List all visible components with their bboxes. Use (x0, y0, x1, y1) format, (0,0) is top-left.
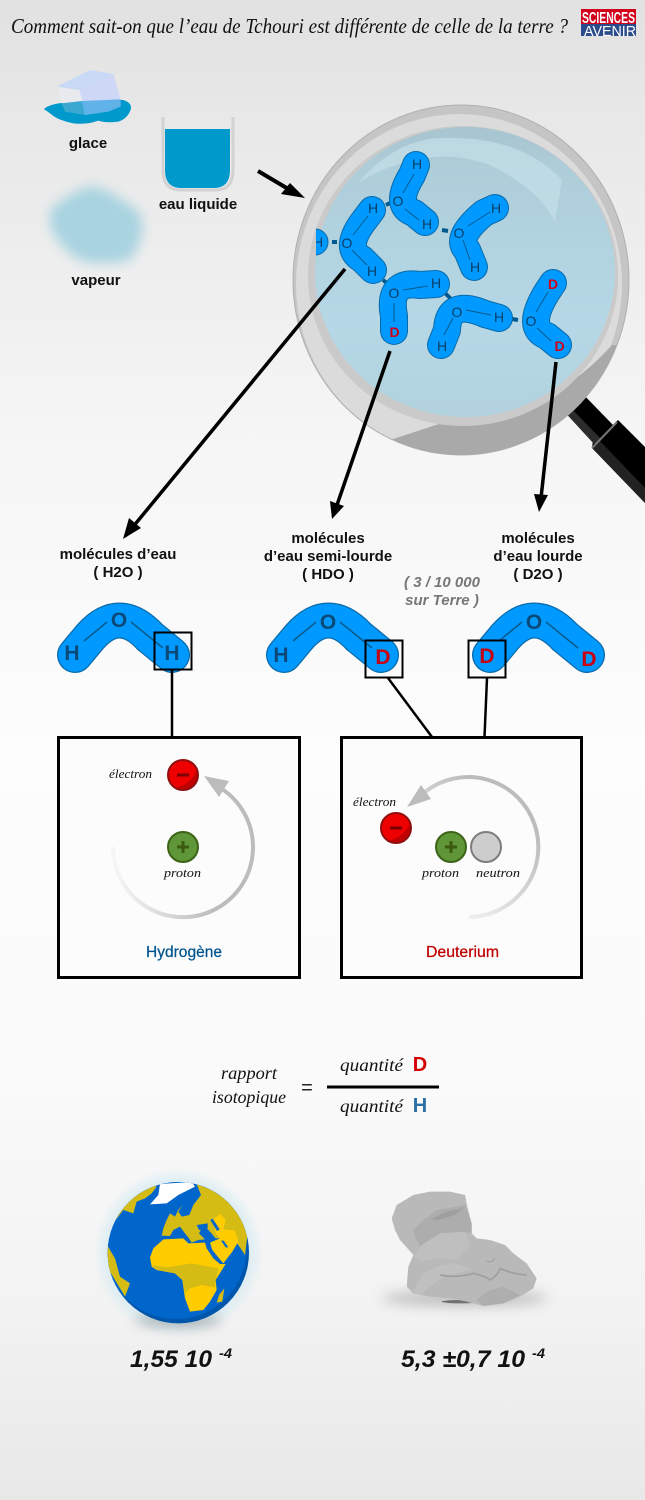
electron (168, 760, 200, 795)
big molecule: D2O (479, 611, 597, 671)
proton (436, 832, 466, 862)
big molecule: D2O: D (479, 645, 495, 668)
molecule H2O right: H (491, 200, 501, 216)
arrow: to heavy water molecule (534, 362, 556, 512)
highlight box on H (154, 632, 192, 670)
Eurasia (162, 1184, 248, 1255)
logo: Sciences et Avenir (581, 9, 636, 40)
molecule H2O right (454, 200, 501, 275)
molecule H2O left (342, 200, 378, 279)
molecule H2O right: H (470, 259, 480, 275)
icon: ice floating on water (44, 70, 131, 124)
value: comet ratio: -4 (532, 1345, 545, 1361)
note: 3 / 10 000 sur Terre: ( 3 / 10 000 (404, 574, 481, 591)
molecules inside the magnifier (302, 156, 565, 354)
panel: deuterium atom (342, 738, 582, 978)
label: molécules d'eau lourde D2O: molécules (501, 530, 575, 547)
label: molécules d'eau semi-lourde HDO (264, 530, 392, 583)
value: Earth ratio: 1,55 10 (130, 1346, 213, 1373)
proton (168, 832, 198, 862)
partial water molecule: H (313, 234, 323, 250)
molecule H2O upper: O (393, 193, 404, 209)
icon: magnifying glass handle (560, 390, 645, 503)
note: 3 / 10 000 sur Terre (404, 574, 481, 609)
Madagascar (217, 1288, 224, 1303)
molecule H2O upper: H (412, 156, 422, 172)
label: eau liquide: eau liquide (159, 196, 237, 213)
label: molécules d'eau semi-lourde HDO: d’eau semi-lourde (264, 548, 392, 565)
Africa (150, 1238, 226, 1312)
big molecule: HDO: O (320, 611, 336, 634)
icon: comet Tchouri (382, 1192, 548, 1306)
label: molécules d'eau semi-lourde HDO: molécules (291, 530, 365, 547)
label: molécules d'eau H2O: molécules d’eau (60, 546, 176, 563)
molecule H2O left: H (368, 200, 378, 216)
label: proton: proton (421, 865, 459, 880)
title: Comment sait-on que l’eau de Tchouri est différente de celle de la terre ? (11, 14, 568, 38)
label: molécules d'eau lourde D2O (493, 530, 583, 583)
molecule D2O: D (554, 338, 565, 354)
South America (108, 1246, 130, 1296)
label: rapport isotopique (212, 1063, 286, 1107)
orbit arrow (113, 776, 253, 917)
molecule HDO: D (389, 324, 400, 340)
icon: beaker of liquid water (163, 117, 233, 190)
label: molécules d'eau lourde D2O: ( D2O ) (513, 566, 563, 583)
arrow: water to magnifier (258, 171, 305, 198)
big molecule: D2O: D (581, 648, 597, 671)
label: électron: électron (353, 794, 396, 809)
molecule HDO: H (431, 275, 441, 291)
molecule HDO: O (389, 285, 400, 301)
molecule D2O: O (526, 313, 537, 329)
denominator: quantité (340, 1096, 404, 1116)
orbit arrow (407, 777, 538, 917)
molecule H2O lower: H (437, 338, 447, 354)
big molecule: H2O: O (111, 609, 127, 632)
formula: isotopic ratio (212, 1054, 439, 1117)
fraction bar (327, 1086, 439, 1088)
Black Sea (197, 1223, 208, 1230)
label: molécules d'eau semi-lourde HDO: ( HDO ) (302, 566, 354, 583)
label: glace: glace (69, 135, 107, 152)
molecule H2O upper (393, 156, 432, 232)
big molecule: H2O: H (64, 642, 80, 665)
label: molécules d'eau H2O: ( H2O ) (93, 564, 143, 581)
molecule H2O lower: H (494, 309, 504, 325)
label: molécules d'eau lourde D2O: d’eau lourde (493, 548, 583, 565)
label: rapport isotopique: isotopique (212, 1087, 286, 1107)
value: Earth ratio: -4 (219, 1345, 232, 1361)
molecule H2O left: O (342, 235, 353, 251)
molecule D2O (526, 276, 565, 354)
highlight box on D of HDO (366, 640, 402, 678)
magnifying glass (293, 105, 640, 470)
highlight box on D of D2O (468, 640, 506, 678)
molecule D2O: D (548, 276, 558, 292)
denominator: H (413, 1095, 427, 1117)
label: rapport isotopique: rapport (221, 1063, 278, 1083)
electron (381, 813, 413, 848)
label: molécules d'eau H2O (60, 546, 176, 581)
molecule H2O lower: O (452, 304, 463, 320)
molecule H2O upper: H (422, 216, 432, 232)
icon: Earth (93, 1167, 264, 1338)
partial water molecule (316, 228, 328, 256)
big molecule: HDO (273, 611, 391, 669)
icon: vapour cloud (50, 186, 142, 264)
numerator: D (413, 1054, 427, 1076)
label: électron: électron (109, 766, 152, 781)
label: Hydrogène: Hydrogène (146, 944, 222, 961)
numerator (340, 1054, 427, 1076)
big molecule: HDO: D (375, 646, 391, 669)
Arabia and Middle East (210, 1231, 238, 1263)
big molecule: HDO: H (273, 644, 289, 667)
neutron (471, 832, 501, 862)
value: comet ratio: 5,3 ±0,7 10 (401, 1346, 526, 1373)
logo: Sciences et Avenir: AVENIR (584, 23, 636, 40)
denominator (340, 1095, 427, 1117)
big molecule: D2O: O (526, 611, 542, 634)
label: Deuterium: Deuterium (426, 944, 499, 961)
molecule H2O lower (437, 304, 504, 354)
label: neutron: neutron (476, 865, 520, 880)
Persian Gulf (221, 1241, 228, 1247)
note: 3 / 10 000 sur Terre: sur Terre ) (405, 592, 479, 609)
big molecule: H2O (64, 609, 180, 665)
North America (115, 1186, 157, 1221)
label: vapeur: vapeur (71, 272, 121, 289)
molecule H2O right: O (454, 225, 465, 241)
connector lines to atom panels (172, 670, 487, 737)
panel: hydrogen atom (58, 738, 300, 978)
equals sign: = (301, 1077, 313, 1099)
numerator: quantité (340, 1055, 404, 1075)
label: proton: proton (163, 865, 201, 880)
arrow: to semi-heavy water molecule (330, 351, 390, 519)
arrow: to water molecule (123, 269, 345, 539)
molecule H2O left: H (367, 263, 377, 279)
Greenland (150, 1182, 195, 1204)
Caspian Sea (210, 1219, 220, 1231)
big molecule: H2O: H (164, 642, 180, 665)
hydrogen bonds (332, 203, 518, 320)
molecule HDO (389, 275, 441, 340)
